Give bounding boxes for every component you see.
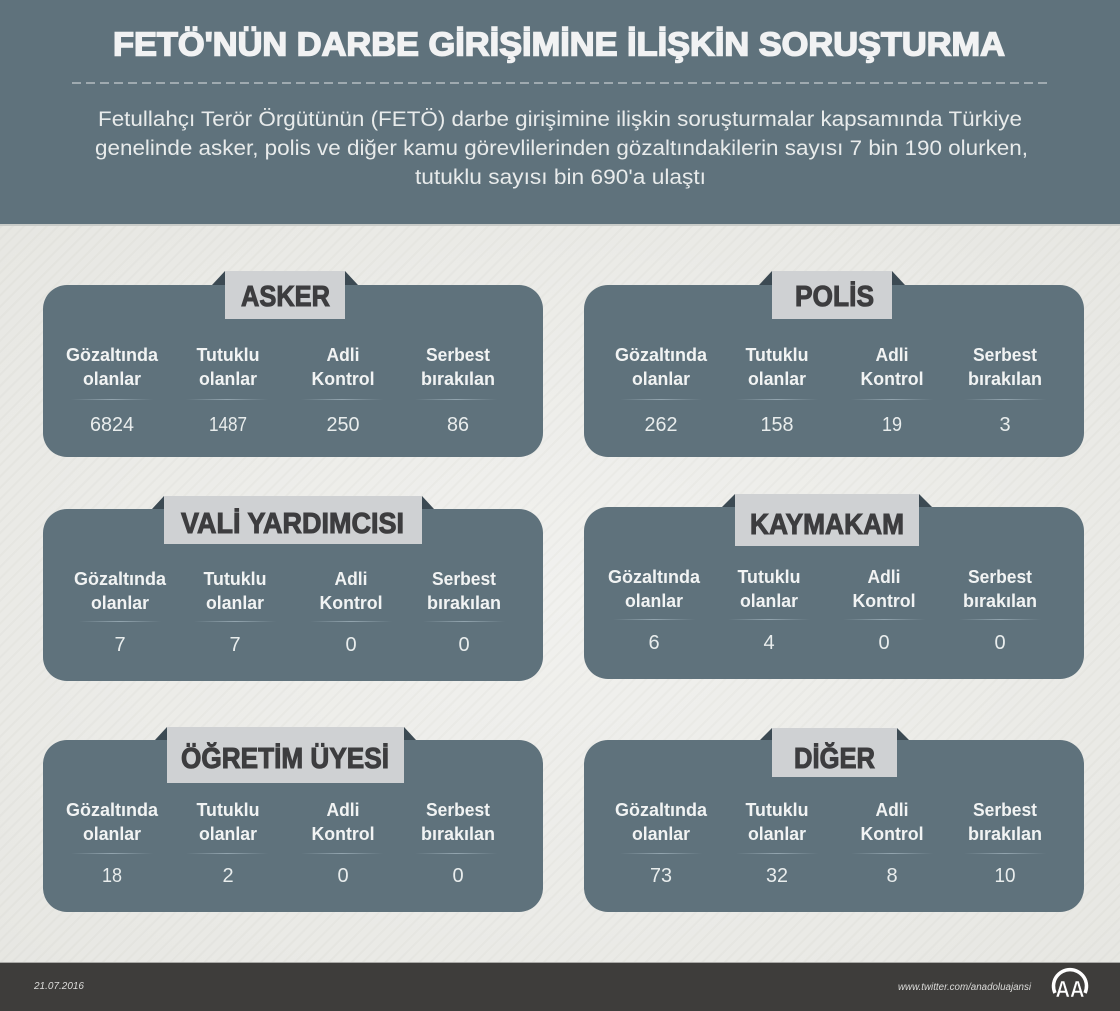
column labels: Tutuklu xyxy=(738,567,800,587)
column labels: Kontrol xyxy=(312,824,374,844)
values: 4 xyxy=(763,632,775,654)
column labels: Kontrol xyxy=(320,593,382,613)
values: 6 xyxy=(648,632,660,654)
column labels: Serbest xyxy=(973,800,1037,820)
column labels: Tutuklu xyxy=(746,345,808,365)
column labels: olanlar xyxy=(632,369,690,389)
column labels: Gözaltında xyxy=(615,800,708,820)
website: www.twitter.com/anadoluajansi xyxy=(898,982,1032,993)
column labels: olanlar xyxy=(83,824,141,844)
panel: diger xyxy=(584,728,1084,912)
date: 21.07.2016 xyxy=(33,981,84,992)
column labels: olanlar xyxy=(91,593,149,613)
title: FETÖ'NÜN DARBE GİRİŞİMİNE İLİŞKİN SORUŞTURMA xyxy=(113,26,1005,62)
tab: ogretim uyesi xyxy=(167,727,404,783)
icon: AA logo: AA xyxy=(1056,976,1084,1002)
column labels: Gözaltında xyxy=(66,800,159,820)
column labels xyxy=(615,345,1042,389)
panel: vali yardimcisi xyxy=(43,496,543,681)
column labels: Kontrol xyxy=(852,591,916,611)
column labels: olanlar xyxy=(199,369,257,389)
values: 7 xyxy=(229,634,241,656)
tab: asker: ASKER xyxy=(241,281,330,313)
column labels: Gözaltında xyxy=(66,345,159,365)
column labels: Serbest xyxy=(968,567,1032,587)
column labels xyxy=(615,800,1042,844)
panel: asker xyxy=(43,271,543,457)
intro text: genelinde asker, polis ve diğer kamu görevlilerinden gözaltındakilerin sayısı 7 bin 190 olurken, xyxy=(95,137,1028,160)
column labels: Gözaltında xyxy=(74,569,167,589)
column labels: Serbest xyxy=(973,345,1037,365)
column labels: Tutuklu xyxy=(196,800,260,820)
column labels: bırakılan xyxy=(968,369,1042,389)
column labels: bırakılan xyxy=(421,824,495,844)
column labels: bırakılan xyxy=(963,591,1037,611)
values: 7 xyxy=(114,634,126,656)
values: 8 xyxy=(886,865,898,887)
panel: polis xyxy=(584,271,1084,457)
column labels: Gözaltında xyxy=(608,567,701,587)
tab: diger: DİĞER xyxy=(794,741,875,775)
values: 6824 xyxy=(90,414,134,436)
values: 0 xyxy=(452,865,464,887)
column labels: olanlar xyxy=(632,824,690,844)
tab: asker xyxy=(225,271,345,319)
values xyxy=(114,634,470,656)
values: 73 xyxy=(650,865,672,887)
panel: kaymakam xyxy=(584,494,1084,679)
column labels: olanlar xyxy=(199,824,257,844)
column labels xyxy=(608,567,1037,611)
column labels: Adli xyxy=(326,800,360,820)
tab: vali yardimcisi xyxy=(164,496,422,544)
values: 158 xyxy=(760,414,794,436)
values xyxy=(102,865,464,887)
footer bar xyxy=(0,962,1120,1011)
column labels: olanlar xyxy=(740,591,798,611)
values xyxy=(648,632,1006,654)
tab: polis xyxy=(772,271,892,319)
values: 19 xyxy=(882,414,902,436)
column labels: olanlar xyxy=(206,593,264,613)
values: 0 xyxy=(345,634,357,656)
values: 1487 xyxy=(209,414,247,436)
column labels xyxy=(66,345,495,389)
column labels xyxy=(74,569,501,613)
values: 18 xyxy=(102,865,122,887)
column labels: Gözaltında xyxy=(615,345,708,365)
tab: ogretim uyesi: ÖĞRETİM ÜYESİ xyxy=(181,741,389,775)
tab: kaymakam: KAYMAKAM xyxy=(750,509,904,541)
column labels: bırakılan xyxy=(968,824,1042,844)
column labels: Adli xyxy=(326,345,360,365)
values: 0 xyxy=(994,632,1006,654)
values: 0 xyxy=(458,634,470,656)
values: 32 xyxy=(766,865,788,887)
column labels: Adli xyxy=(876,345,908,365)
values xyxy=(650,865,1016,887)
header band xyxy=(0,0,1120,226)
column labels: olanlar xyxy=(748,369,806,389)
column labels: Tutuklu xyxy=(196,345,260,365)
tab: kaymakam xyxy=(735,494,919,546)
intro text: Fetullahçı Terör Örgütünün (FETÖ) darbe girişimine ilişkin soruşturmalar kapsamında Türkiye xyxy=(98,108,1022,131)
panel: ogretim uyesi xyxy=(43,727,543,912)
column labels: Adli xyxy=(876,800,908,820)
values xyxy=(90,414,469,436)
tab: vali yardimcisi: VALİ YARDIMCISI xyxy=(181,508,404,540)
column labels: Tutuklu xyxy=(204,569,266,589)
column labels: Serbest xyxy=(432,569,496,589)
column labels: Kontrol xyxy=(860,369,924,389)
values: 3 xyxy=(999,414,1011,436)
tab: diger xyxy=(772,728,897,777)
column labels: Serbest xyxy=(426,345,490,365)
column labels: olanlar xyxy=(625,591,683,611)
column labels: bırakılan xyxy=(427,593,501,613)
values xyxy=(644,414,1011,436)
values: 0 xyxy=(337,865,349,887)
column labels: Kontrol xyxy=(860,824,924,844)
column labels: Tutuklu xyxy=(746,800,808,820)
column labels: Serbest xyxy=(426,800,490,820)
values: 86 xyxy=(447,414,469,436)
column labels: olanlar xyxy=(83,369,141,389)
intro text: tutuklu sayısı bin 690'a ulaştı xyxy=(415,166,706,189)
column labels xyxy=(66,800,495,844)
values: 10 xyxy=(994,865,1016,887)
column labels: Kontrol xyxy=(312,369,374,389)
column labels: Adli xyxy=(334,569,368,589)
values: 250 xyxy=(326,414,360,436)
column labels: olanlar xyxy=(748,824,806,844)
values: 262 xyxy=(644,414,678,436)
values: 2 xyxy=(222,865,234,887)
intro text xyxy=(95,108,1028,189)
values: 0 xyxy=(878,632,890,654)
column labels: Adli xyxy=(868,567,900,587)
column labels: bırakılan xyxy=(421,369,495,389)
tab: polis: POLİS xyxy=(795,281,874,313)
